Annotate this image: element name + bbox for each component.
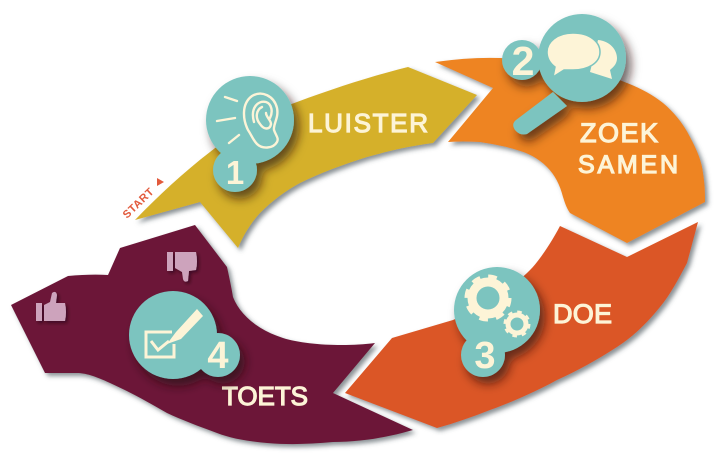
check mark <box>151 341 169 350</box>
label: doe: DOE <box>553 299 612 329</box>
orange band <box>435 58 705 243</box>
number 4: 4 <box>207 335 229 377</box>
label: zoek: ZOEK <box>580 118 658 148</box>
badge shape <box>502 14 626 134</box>
icon: badge 3 gears <box>454 267 540 377</box>
front speech bubble <box>547 33 600 77</box>
yellow band <box>135 67 477 248</box>
label: luister: LUISTER <box>308 108 428 138</box>
badge shape <box>454 267 540 377</box>
big gear <box>467 277 509 319</box>
number 3: 3 <box>474 335 496 377</box>
number 1: 1 <box>226 154 244 191</box>
panel: maroon arrow toets <box>11 225 413 444</box>
icon: thumb up <box>36 292 66 321</box>
back speech bubble <box>590 40 617 79</box>
number 2: 2 <box>512 38 534 84</box>
maroon band <box>11 225 413 444</box>
icon: thumb down <box>167 252 197 282</box>
badge shape <box>206 76 294 192</box>
label: samen: SAMEN <box>578 151 678 179</box>
panel: orange arrow zoek samen <box>435 58 705 243</box>
label: start <box>121 178 164 221</box>
start arrowhead <box>157 178 164 186</box>
panel: yellow arrow luister <box>135 67 477 248</box>
checkbox <box>146 332 174 357</box>
pencil <box>167 309 203 344</box>
panel: red arrow doe <box>345 222 698 428</box>
ear drawing <box>217 94 278 148</box>
label: toets: TOETS <box>222 381 308 411</box>
icon: badge 4 checkbox and pencil <box>129 291 240 379</box>
icon: badge 2 magnifier and chat <box>502 14 626 134</box>
small gear <box>505 312 529 336</box>
badge shape <box>129 291 240 379</box>
icon: badge 1 ear <box>206 76 294 192</box>
label: start: START <box>121 186 157 221</box>
red band <box>345 222 698 428</box>
